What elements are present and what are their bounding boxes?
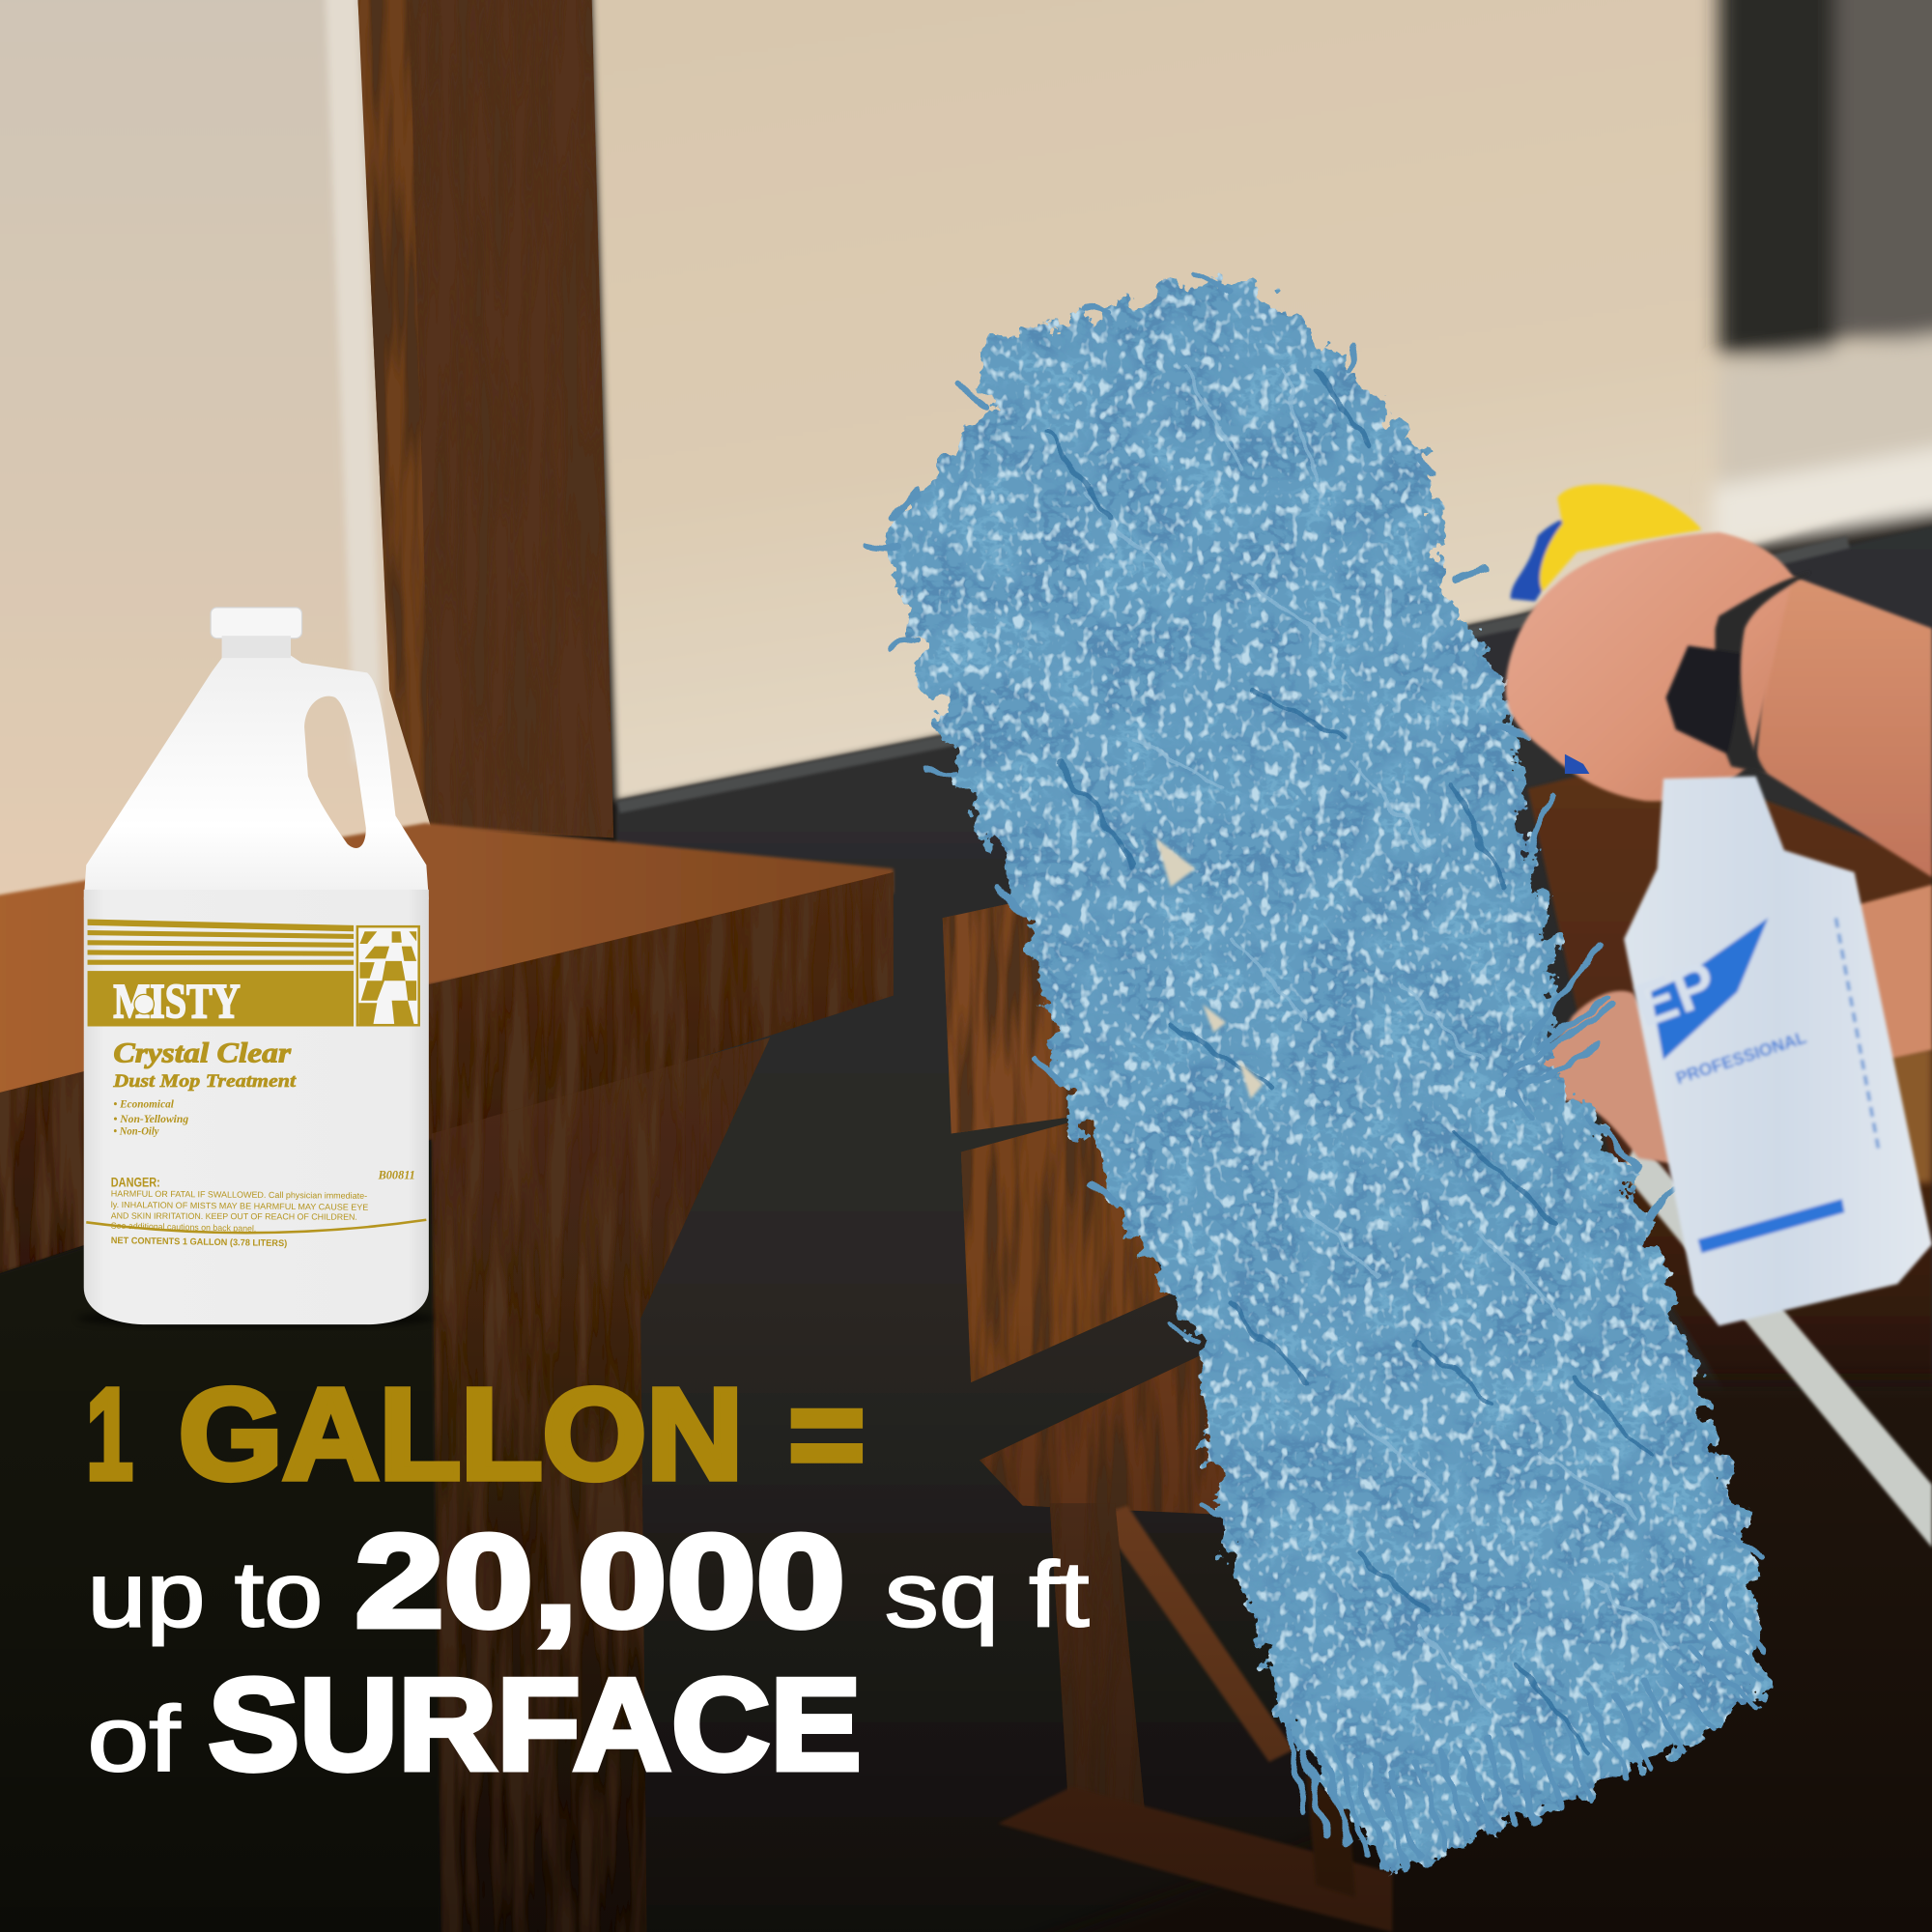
bottom shading: [0, 1293, 1932, 1932]
danger warning: HARMFUL OR FATAL IF SWALLOWED. Call physician immediate-: [111, 1189, 367, 1201]
blue logo wedge: [1651, 918, 1768, 1060]
wainscot: [616, 524, 1932, 1932]
photo: lower forearm: [1855, 885, 1932, 1060]
product type: Dust Mop Treatment: [112, 1071, 297, 1092]
chair mid slat: [961, 1115, 1171, 1382]
label gold band: [88, 971, 354, 1026]
chair upper slat: [943, 899, 1084, 1133]
product: gallon bottle: [77, 608, 435, 1328]
bottle cap: [211, 608, 301, 639]
blue bar: [1698, 1199, 1844, 1253]
danger warning: See additional cautions on back panel.: [111, 1221, 256, 1234]
danger warning: DANGER:: [111, 1174, 160, 1189]
chair seat: [980, 1350, 1244, 1516]
bottle shadow: [77, 1309, 435, 1328]
right bench wood: [1528, 757, 1932, 1392]
left wall: [0, 0, 443, 912]
photo: forearm: [1756, 569, 1932, 877]
yellow trigger: [1540, 485, 1701, 591]
headline line 1: =: [788, 1363, 865, 1507]
wood patch behind bottle: [1886, 1047, 1932, 1182]
wooden post: [357, 0, 613, 838]
photo: dust mop head: [868, 273, 1765, 1873]
right floor: [961, 1380, 1932, 1932]
dark edge of post: [357, 0, 431, 828]
television on wall: [1713, 0, 1932, 552]
photo: hand: [1506, 532, 1793, 801]
product bullets: • Non-Oily: [113, 1126, 159, 1138]
product bullets: • Non-Yellowing: [113, 1114, 188, 1125]
headline line 3: SURFACE: [209, 1652, 862, 1798]
mop light yarn: [1084, 370, 1676, 1713]
checker floor emblem: [357, 926, 419, 1025]
headline: [86, 1363, 1090, 1798]
chair back leg: [1306, 1775, 1355, 1897]
bottle body: [1624, 777, 1932, 1325]
headline line 1: 1: [86, 1363, 133, 1507]
blue nozzle: [1511, 516, 1589, 601]
chair foot rail: [998, 1786, 1392, 1932]
danger warning: [111, 1174, 368, 1234]
photo: lower hand gripping pole: [1506, 991, 1678, 1164]
mop backing gaps: [1155, 838, 1263, 1099]
SKU: B00811: [378, 1169, 415, 1182]
product bullets: • Economical: [113, 1099, 175, 1111]
lower left dark wall: [0, 1140, 441, 1932]
headline line 1: GALLON: [179, 1363, 743, 1507]
bottle label text: PROFESSIONAL: [1673, 1028, 1808, 1088]
bottle neck: [222, 636, 291, 658]
headline line 2: sq ft: [885, 1544, 1090, 1647]
photo: mop pole: [1622, 1140, 1932, 1548]
watch band: [1716, 572, 1811, 774]
photo: blue trigger lever: [1565, 754, 1589, 774]
bottle shoulder and handle: [84, 653, 429, 899]
chair leg: [1050, 1503, 1146, 1824]
product bullets: [113, 1099, 188, 1138]
right wall: [591, 0, 1932, 801]
measuring scale: [1836, 918, 1879, 1152]
table support: [431, 1037, 770, 1932]
label stripes: [88, 920, 354, 965]
bottle body: [84, 890, 429, 1324]
table top: [0, 823, 894, 1096]
net contents: NET CONTENTS 1 GALLON (3.78 LITERS): [111, 1236, 287, 1249]
headline line 3: of: [88, 1688, 181, 1791]
headline line 2: [88, 1507, 1090, 1655]
photo: trigger spray head: [1511, 485, 1701, 601]
table front: [0, 872, 894, 1275]
mop body: [881, 281, 1765, 1873]
headline line 2: up to: [88, 1544, 323, 1647]
photo: spray bottle: [1624, 777, 1932, 1325]
chair rail: [1096, 1506, 1293, 1762]
label rule: [86, 1220, 426, 1233]
MISTY logo: MISTY: [113, 976, 241, 1030]
logo letters: EP: [1625, 948, 1725, 1040]
photo: smart watch: [1665, 572, 1811, 774]
danger warning: AND SKIN IRRITATION. KEEP OUT OF REACH OF CHILDREN.: [111, 1210, 357, 1222]
mop dark yarn: [1047, 370, 1651, 1749]
danger warning: ly. INHALATION OF MISTS MAY BE HARMFUL MAY CAUSE EYE: [111, 1200, 368, 1212]
wall trim line: [618, 542, 1848, 807]
product name: Crystal Clear: [113, 1037, 292, 1068]
headline line 2: 20,000: [355, 1507, 845, 1655]
mop fringe strands: [868, 273, 1762, 1866]
watch face: [1665, 645, 1740, 754]
